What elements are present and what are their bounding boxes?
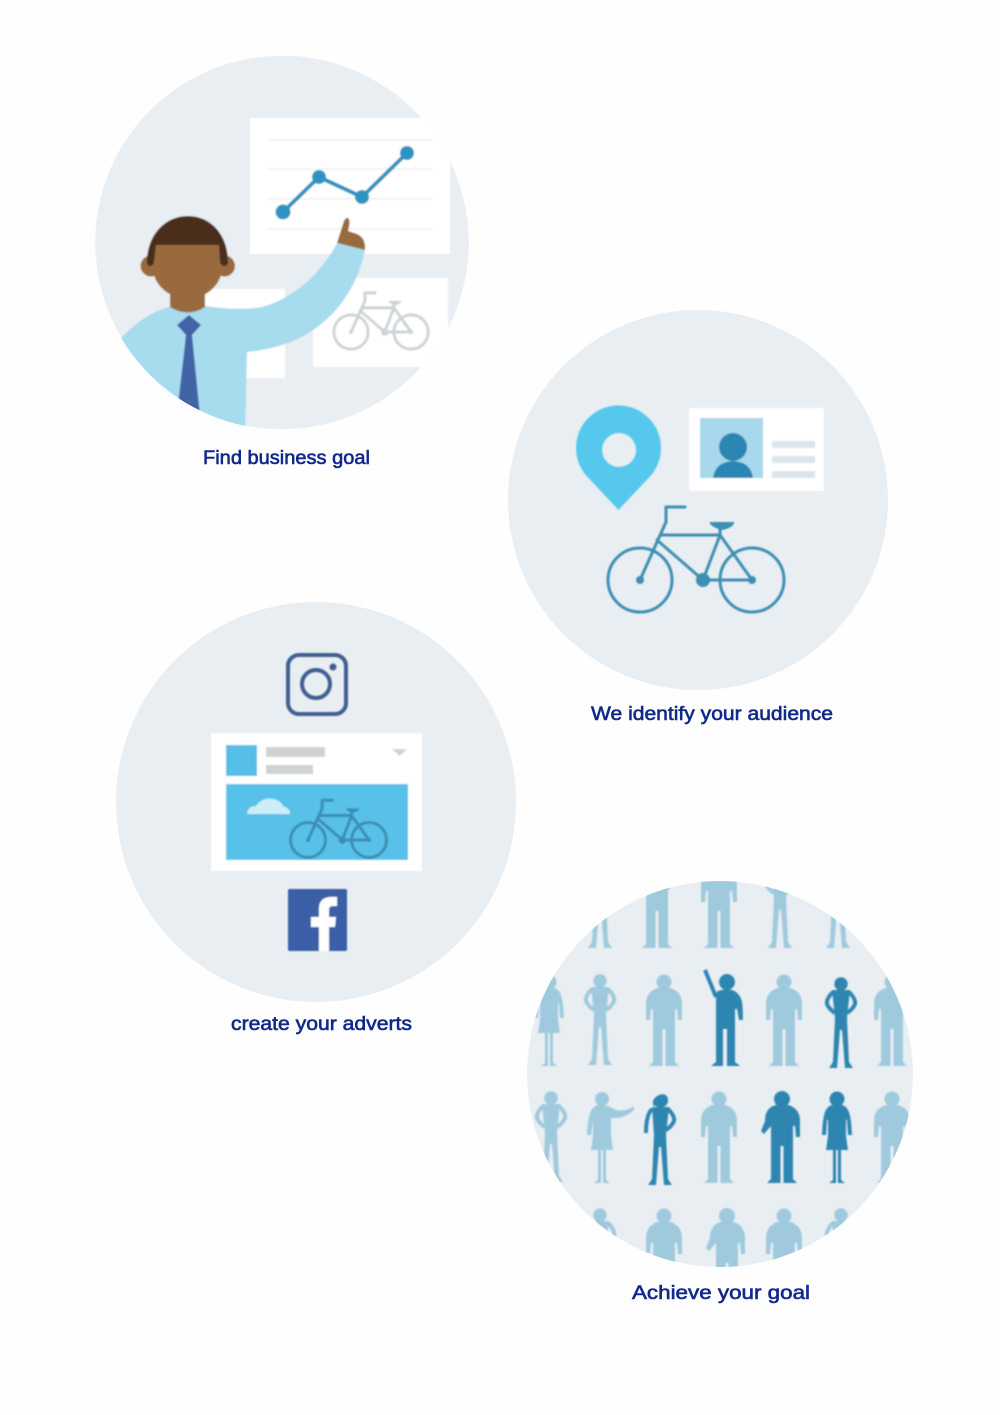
illustration xyxy=(211,655,422,951)
background circle xyxy=(527,881,913,1267)
ears xyxy=(140,256,156,278)
illustration xyxy=(576,405,824,612)
background circle xyxy=(95,56,469,430)
hair xyxy=(147,216,228,266)
back card xyxy=(200,289,285,378)
line chart xyxy=(276,146,414,220)
face xyxy=(153,245,222,299)
crowd illustration xyxy=(527,881,913,1267)
icon: location pin xyxy=(576,405,661,510)
label: Achieve your goal xyxy=(632,1282,810,1304)
neck xyxy=(170,290,205,312)
background circle xyxy=(508,310,888,690)
illustration: presenter at chart xyxy=(95,56,469,440)
person xyxy=(115,216,365,440)
panel: identify audience xyxy=(508,310,888,725)
label: create your adverts xyxy=(231,1013,412,1035)
label: We identify your audience xyxy=(591,703,833,725)
panel: achieve goal xyxy=(527,856,913,1304)
panel: find business goal xyxy=(95,56,469,469)
icon: instagram xyxy=(288,655,346,714)
icon: facebook xyxy=(288,889,347,951)
bike card xyxy=(313,278,448,367)
panel: create adverts xyxy=(116,602,516,1035)
shirt xyxy=(115,243,365,440)
advert card xyxy=(211,733,422,871)
light figures xyxy=(534,881,909,1267)
hand xyxy=(337,218,365,250)
profile card xyxy=(689,408,824,491)
chart card xyxy=(250,118,450,254)
icon: bicycle xyxy=(608,507,784,612)
label: Find business goal xyxy=(203,447,370,469)
highlighted figures xyxy=(646,970,855,1185)
background circle xyxy=(116,602,516,1002)
tie xyxy=(177,315,201,415)
infographic xyxy=(95,56,913,1304)
